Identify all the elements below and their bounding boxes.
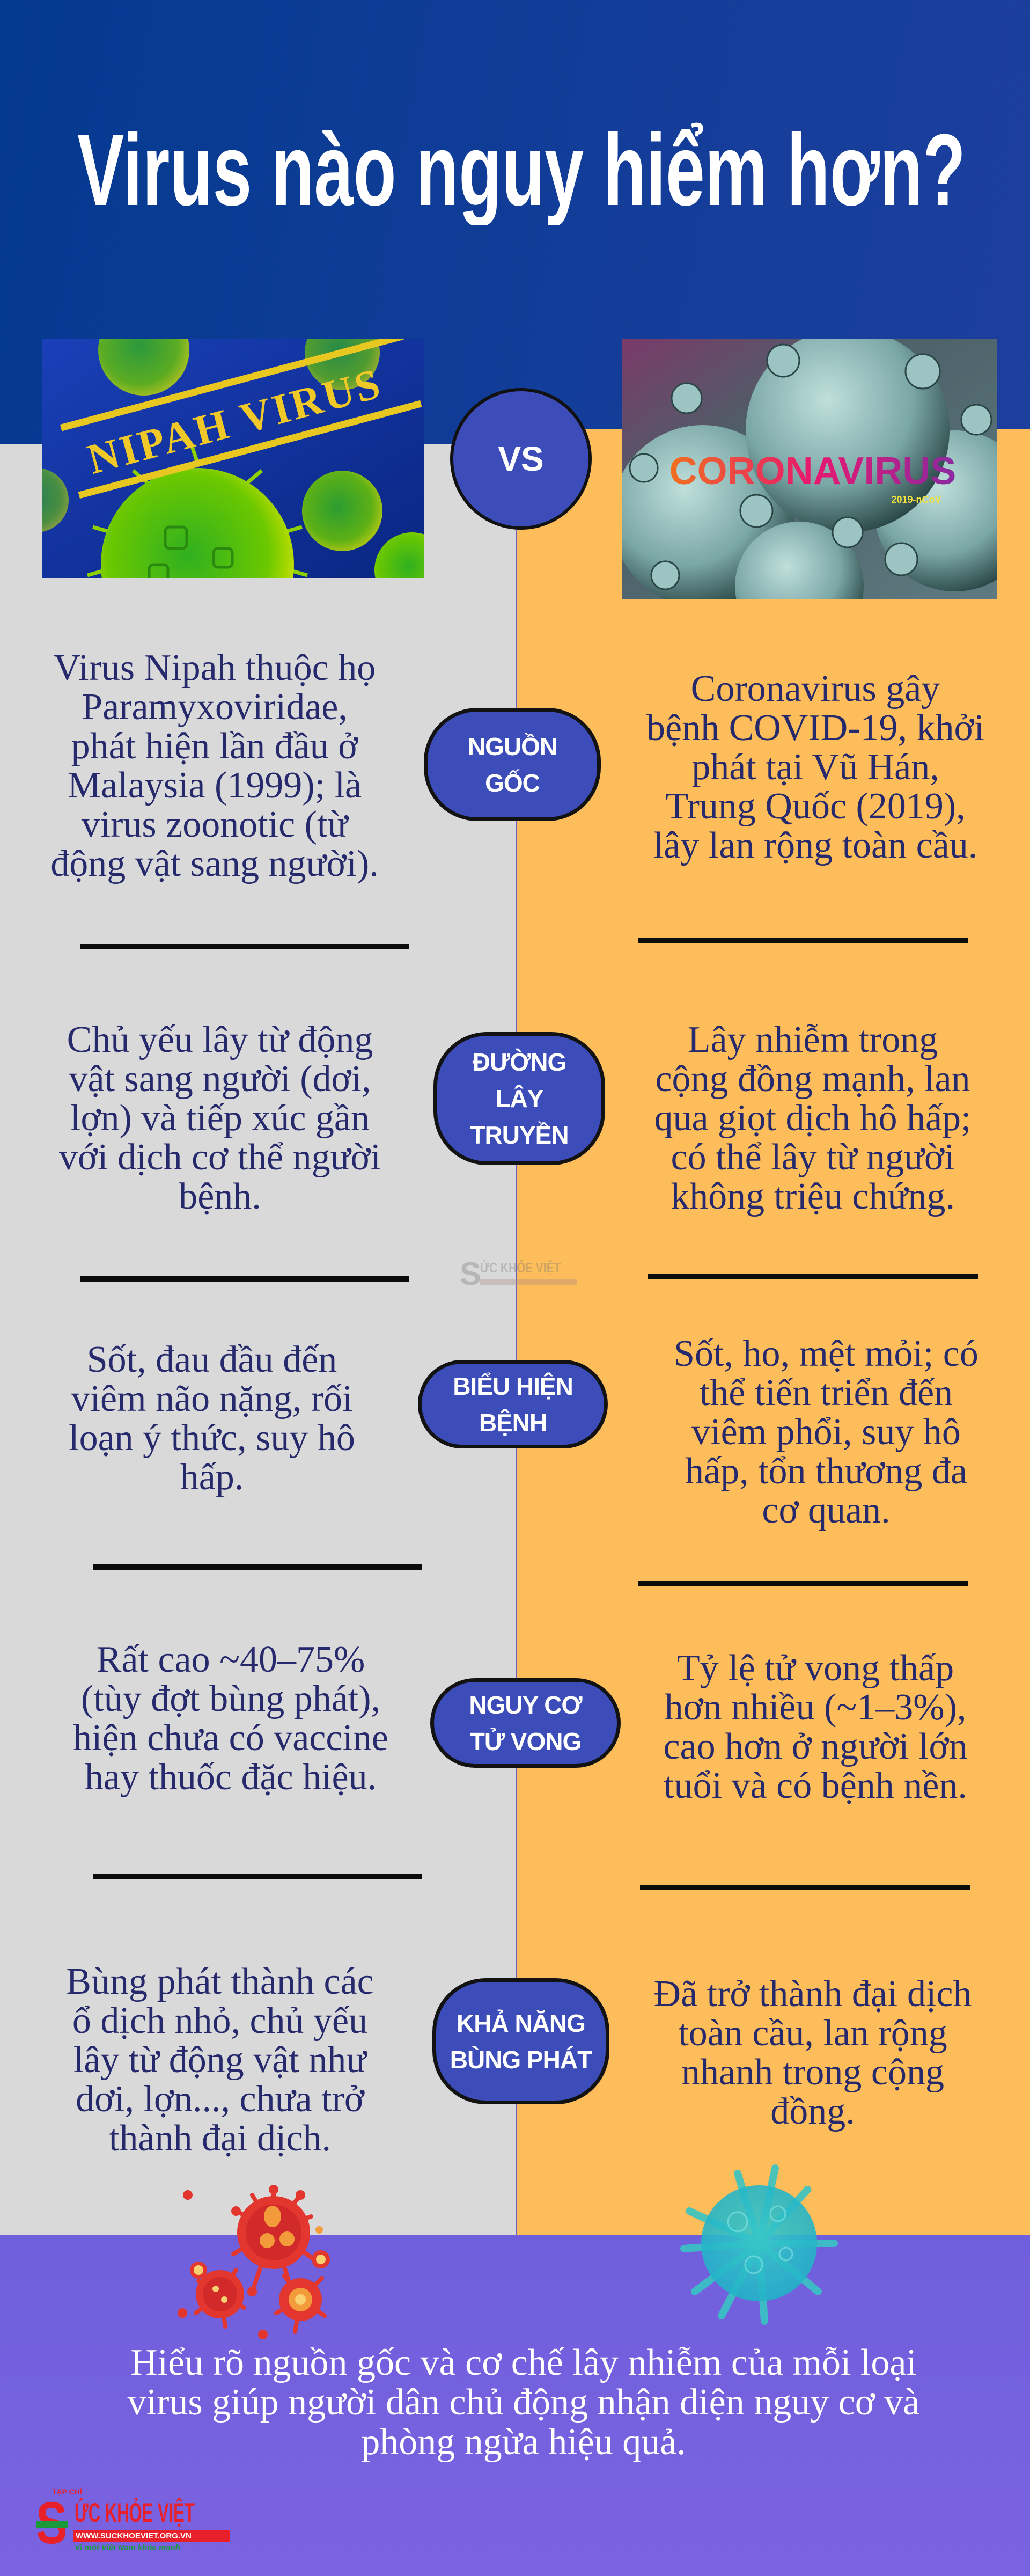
label pill: nguy cơ tử vong — [430, 1678, 621, 1768]
logo: Sức Khỏe Việt: S — [36, 2490, 68, 2556]
panel: nguồn gốc — [50, 647, 984, 884]
label pill: đường lây truyền: ĐƯỜNG — [473, 1048, 566, 1076]
logo: Sức Khỏe Việt: WWW.SUCKHOEVIET.ORG.VN — [76, 2531, 192, 2541]
text: Nipah mortality — [73, 1639, 388, 1798]
label pill: đường lây truyền: TRUYỀN — [470, 1121, 569, 1149]
text: Corona symptoms — [674, 1333, 979, 1531]
text: Nipah transmission: Chủ yếu lây từ động — [67, 1019, 373, 1060]
text: Corona mortality: tuổi và có bệnh nền. — [664, 1765, 967, 1806]
text: Nipah outbreak: thành đại dịch. — [109, 2118, 331, 2159]
text: conclusion: virus giúp người dân chủ động nhận diện nguy cơ và — [128, 2382, 919, 2423]
text: Nipah outbreak: Bùng phát thành các — [66, 1961, 374, 2002]
text: Corona symptoms: hấp, tổn thương đa — [685, 1451, 967, 1492]
text: Nipah transmission: với dịch cơ thể người — [59, 1137, 381, 1178]
text: Corona origin: bệnh COVID-19, khởi — [646, 707, 984, 749]
panel: nguy cơ tử vong — [73, 1639, 968, 1806]
text: Corona outbreak — [654, 1973, 972, 2132]
text: Nipah symptoms: loạn ý thức, suy hô — [69, 1417, 355, 1459]
label pill: đường lây truyền — [433, 1032, 605, 1165]
text: Nipah outbreak — [66, 1961, 374, 2159]
text: conclusion — [128, 2342, 919, 2463]
text: Corona transmission: qua giọt dịch hô hấp; — [654, 1097, 971, 1139]
label pill: khả năng bùng phát — [432, 1978, 609, 2104]
image: Coronavirus — [622, 339, 997, 599]
text: Nipah mortality: (tùy đợt bùng phát), — [81, 1678, 380, 1719]
text: Nipah mortality: Rất cao ~40–75% — [97, 1639, 365, 1680]
image: Coronavirus: CORONAVIRUS — [670, 450, 956, 493]
text: Corona mortality — [663, 1648, 968, 1806]
background: right orange column — [516, 429, 1030, 2235]
label pill: nguồn gốc: GỐC — [485, 769, 540, 796]
background: footer purple — [0, 2235, 1030, 2576]
text: Corona origin: Coronavirus gây — [691, 668, 940, 709]
text: Corona transmission: Lây nhiễm trong — [688, 1019, 938, 1060]
text: Nipah mortality: hay thuốc đặc hiệu. — [85, 1757, 377, 1798]
text: Corona outbreak: nhanh trong cộng — [681, 2052, 944, 2093]
text: conclusion: Hiểu rõ nguồn gốc và cơ chế lây nhiễm của mỗi loại — [130, 2342, 917, 2383]
text: Corona transmission: không triệu chứng. — [671, 1176, 955, 1217]
background: header blue — [0, 0, 1030, 444]
text: Nipah origin: virus zoonotic (từ — [82, 804, 348, 845]
text: Corona symptoms: thể tiến triển đến — [700, 1372, 953, 1414]
text: Nipah outbreak: dơi, lợn..., chưa trở — [76, 2079, 364, 2120]
logo: Sức Khỏe Việt — [36, 2487, 230, 2556]
text: Corona outbreak: toàn cầu, lan rộng — [678, 2012, 947, 2054]
label pill: biểu hiện bệnh: BIỂU HIỆN — [453, 1372, 573, 1400]
icon: VS circle: VS — [498, 440, 544, 478]
label pill: khả năng bùng phát: BÙNG PHÁT — [450, 2046, 592, 2074]
label pill: nguồn gốc — [424, 708, 601, 821]
text: Corona transmission: có thể lây từ người — [671, 1137, 954, 1178]
text: Nipah outbreak: ổ dịch nhỏ, chủ yếu — [72, 2000, 367, 2041]
text: Nipah origin: động vật sang người). — [50, 843, 379, 884]
text: Corona origin: Trung Quốc (2019), — [665, 786, 966, 827]
text: Nipah origin: Paramyxoviridae, — [82, 686, 348, 728]
text: Nipah symptoms: hấp. — [180, 1457, 244, 1498]
watermark logo — [460, 1256, 577, 1292]
image: Nipah virus: NIPAH VIRUS — [83, 360, 387, 484]
text: Nipah symptoms: viêm não nặng, rối — [71, 1378, 352, 1419]
label pill: biểu hiện bệnh — [418, 1360, 608, 1448]
text: Nipah transmission: vật sang người (dơi, — [69, 1058, 371, 1100]
text: Nipah origin: Malaysia (1999); là — [68, 765, 362, 806]
icon: red virus cluster — [178, 2185, 330, 2339]
text: Corona outbreak: đồng. — [770, 2091, 855, 2132]
text: Corona origin — [646, 668, 984, 866]
text: conclusion: phòng ngừa hiệu quả. — [361, 2421, 686, 2463]
text: Corona mortality: hơn nhiều (~1–3%), — [665, 1687, 966, 1728]
text: Corona mortality: cao hơn ở người lớn — [663, 1726, 968, 1767]
label pill: nguy cơ tử vong: TỬ VONG — [470, 1727, 581, 1755]
text: Corona origin: lây lan rộng toàn cầu. — [653, 825, 977, 866]
icon: VS circle — [450, 388, 592, 530]
text: Corona transmission: cộng đồng mạnh, lan — [655, 1058, 970, 1100]
text: Corona outbreak: Đã trở thành đại dịch — [654, 1973, 972, 2015]
label pill: đường lây truyền: LÂY — [496, 1085, 543, 1113]
text: Nipah symptoms — [69, 1339, 355, 1498]
text: Nipah mortality: hiện chưa có vaccine — [73, 1717, 388, 1759]
icon: teal coronavirus — [680, 2164, 838, 2325]
text: Nipah transmission — [59, 1019, 381, 1217]
text: Corona symptoms: cơ quan. — [762, 1490, 891, 1531]
panel: khả năng bùng phát — [66, 1961, 972, 2159]
text: Nipah transmission: lợn) và tiếp xúc gần — [70, 1097, 370, 1139]
text: Corona transmission — [654, 1019, 971, 1217]
text: Nipah outbreak: lây từ động vật như — [73, 2039, 366, 2081]
logo: Sức Khỏe Việt: Vì một Việt Nam khỏe mạnh — [75, 2543, 180, 2552]
watermark logo: S — [460, 1256, 481, 1292]
text: Nipah symptoms: Sốt, đau đầu đến — [87, 1339, 337, 1380]
image: Coronavirus: 2019-nCoV — [891, 494, 941, 505]
text: Nipah origin — [50, 647, 379, 884]
label pill: khả năng bùng phát: KHẢ NĂNG — [457, 2009, 585, 2037]
logo: Sức Khỏe Việt: ỨC KHỎE VIỆT — [75, 2498, 195, 2528]
text: Corona symptoms: Sốt, ho, mệt mỏi; có — [674, 1333, 979, 1374]
label pill: nguy cơ tử vong: NGUY CƠ — [469, 1690, 582, 1718]
text: Corona origin: phát tại Vũ Hán, — [691, 747, 939, 788]
text: Corona symptoms: viêm phổi, suy hô — [691, 1411, 961, 1453]
text: Nipah origin: Virus Nipah thuộc họ — [54, 647, 376, 689]
label pill: nguồn gốc: NGUỒN — [468, 732, 557, 760]
label pill: biểu hiện bệnh: BỆNH — [479, 1408, 547, 1436]
text: Nipah origin: phát hiện lần đầu ở — [71, 726, 358, 767]
text: Nipah transmission: bệnh. — [179, 1176, 261, 1217]
image: Nipah virus — [42, 339, 424, 578]
text: Corona mortality: Tỷ lệ tử vong thấp — [677, 1648, 954, 1689]
panel: đường lây truyền — [59, 1019, 971, 1217]
watermark logo: ỨC KHỎE VIỆT — [480, 1260, 561, 1276]
logo: Sức Khỏe Việt: TẠP CHÍ — [52, 2487, 82, 2496]
panel: biểu hiện bệnh — [69, 1333, 979, 1531]
background: left grey column — [0, 444, 516, 2235]
